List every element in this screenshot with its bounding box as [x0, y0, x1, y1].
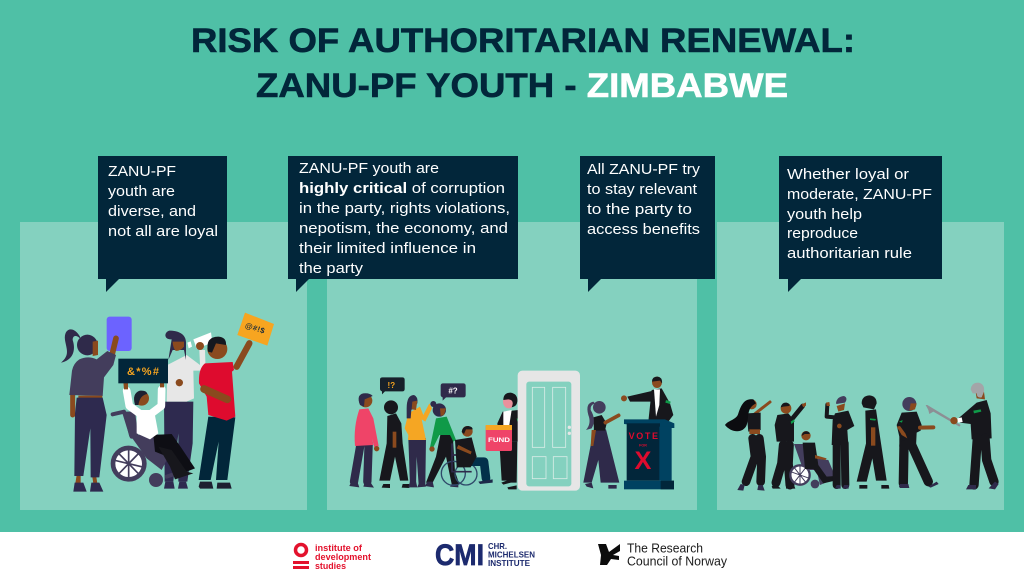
figure: man at podium — [621, 377, 673, 422]
title: RISK OF AUTHORITARIAN RENEWAL: — [191, 22, 855, 60]
placard: @#!$ — [244, 321, 267, 336]
callout: diverse — [98, 156, 227, 292]
figure: wheelchair user with placard — [113, 359, 195, 487]
logo: CMI: MICHELSEN — [488, 550, 535, 560]
logo: CMI — [435, 539, 535, 572]
logo: The Research Council of Norway: Council of Norway — [627, 554, 728, 568]
title — [191, 22, 855, 105]
placard: &*%# — [127, 366, 159, 378]
callout: highly critical: in the party, rights violations, — [299, 200, 510, 217]
figure: elder with baton — [926, 383, 999, 489]
logo: Institute of Development Studies — [293, 543, 372, 572]
callout: stay relevant: to stay relevant — [587, 181, 698, 198]
figure: officer with helmet — [897, 397, 939, 488]
logo: The Research Council of Norway: The Research — [627, 542, 703, 556]
callout: reproduce authoritarian rule: moderate, ZANU-PF — [787, 186, 932, 203]
figure: woman with long hair — [725, 399, 770, 491]
logo: The Research Council of Norway — [598, 542, 728, 568]
callout: diverse: diverse, and — [108, 203, 196, 220]
icon: purple placard — [107, 317, 132, 351]
logo: CMI: INSTITUTE — [488, 558, 530, 568]
logo: Institute of Development Studies: studies — [315, 561, 346, 572]
speech bubble: exclamation — [380, 377, 405, 394]
callout: reproduce authoritarian rule: reproduce — [787, 225, 858, 242]
icon: vote podium: FOR — [639, 444, 647, 448]
speech bubble: hash — [441, 383, 466, 401]
callout: reproduce authoritarian rule — [779, 156, 942, 292]
footer band — [0, 532, 1024, 576]
figure: official with fund box — [486, 393, 524, 489]
callout: reproduce authoritarian rule: authoritarian rule — [787, 245, 912, 262]
figure: woman in green — [425, 401, 459, 487]
callout: stay relevant: to the party to — [587, 201, 692, 218]
figure: woman in black — [379, 400, 409, 488]
icon: door — [518, 371, 580, 491]
illustration: aligned youth in black with baton-wielding elder — [725, 383, 999, 491]
fund box: FUND — [488, 437, 510, 444]
figure: man raising arm — [772, 402, 806, 489]
illustration: protesters group — [61, 313, 274, 492]
logo: CMI: CHR. — [488, 541, 507, 551]
panel: diverse youth — [20, 222, 307, 510]
placard — [237, 313, 274, 346]
icon: vote podium: VOTE — [629, 431, 658, 441]
callout: highly critical: ZANU-PF youth are — [299, 160, 439, 177]
callout: diverse: youth are — [108, 183, 175, 200]
figure: wheelchair user — [441, 426, 493, 485]
figure: seated wheelchair user — [790, 431, 836, 488]
figure: woman in orange — [405, 395, 432, 487]
illustration: youth queue, door and podium — [349, 371, 674, 491]
callout: highly critical: highly critical of corruption — [299, 180, 505, 197]
figure: woman with megaphone — [164, 331, 212, 489]
figure: man in pink — [349, 393, 379, 488]
title: ZANU-PF YOUTH - ZIMBABWE — [256, 67, 788, 105]
callout: highly critical — [288, 156, 518, 292]
callout: reproduce authoritarian rule: youth help — [787, 206, 862, 223]
callout: highly critical: the party — [299, 260, 364, 277]
callout: reproduce authoritarian rule: Whether loyal or — [787, 166, 909, 183]
logo: CMI: CMI — [435, 539, 484, 572]
icon: vote podium: X — [635, 447, 652, 475]
speech bubble: exclamation: !? — [388, 381, 395, 390]
icon: vote podium — [624, 419, 674, 489]
callout: highly critical: nepotism, the economy, and — [299, 220, 508, 237]
logo: Institute of Development Studies: development — [315, 552, 372, 563]
figure: man in red shirt — [199, 313, 274, 489]
callout: stay relevant: All ZANU-PF try — [587, 161, 701, 178]
figure: woman with bob hair — [857, 395, 889, 489]
speech bubble: hash: #? — [448, 387, 458, 396]
logo: Institute of Development Studies: institute of — [315, 543, 363, 554]
figure: woman with ponytail — [61, 329, 116, 492]
callout: diverse: ZANU-PF — [108, 163, 176, 180]
panel: critical youth and staying relevant — [327, 222, 697, 510]
panel: reproducing authoritarian rule — [717, 222, 1004, 510]
figure: woman with hair bun — [826, 396, 854, 489]
callout: diverse: not all are loyal — [108, 223, 218, 240]
callout: highly critical: their limited influence in — [299, 240, 476, 257]
callout: stay relevant — [580, 156, 715, 292]
callout: stay relevant: access benefits — [587, 221, 700, 238]
figure: woman in wide trousers — [583, 401, 619, 489]
